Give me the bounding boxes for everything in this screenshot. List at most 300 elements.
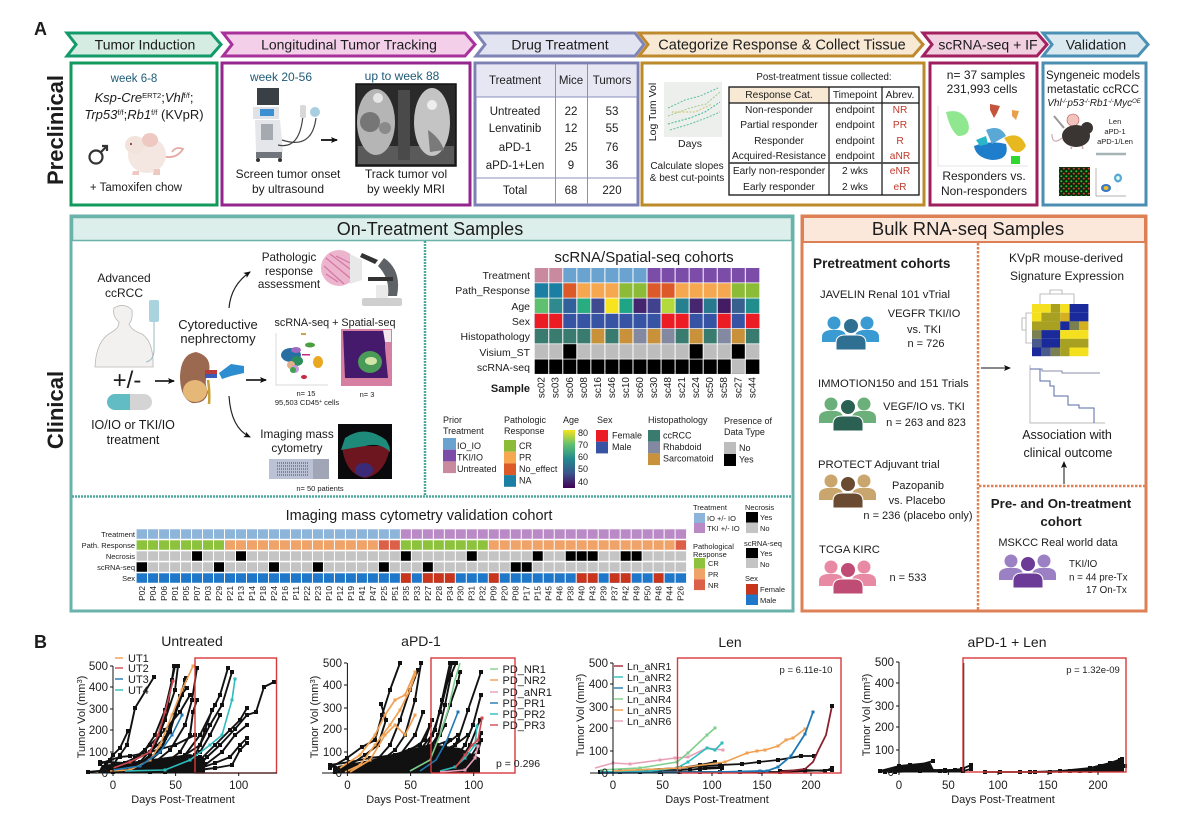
chevron: Longitudinal Tumor Tracking: Longitudinal Tumor Tracking <box>261 36 437 52</box>
legend: UT2 <box>128 663 149 675</box>
chart: aPD-1 + Len <box>860 634 1126 806</box>
x tick labels: 100 <box>229 780 248 792</box>
caption: n=50 patients: n= 50 patients <box>296 484 344 493</box>
x tick labels: 200 <box>1088 780 1108 792</box>
x tick labels: 50 <box>169 780 182 792</box>
chart: UMAP <box>938 104 1028 166</box>
IMC row labels: Necrosis <box>106 552 135 561</box>
table text <box>486 75 632 197</box>
table text: 55 <box>606 123 618 135</box>
IMC patient labels: P20 <box>500 586 510 601</box>
y tick labels: 200 <box>323 724 342 736</box>
cohort: IMMOTION: VEGF/IO vs. TKI <box>883 401 965 413</box>
heading: post-treatment tissue: Post-treatment tissue collected: <box>756 72 892 83</box>
legend: age colorbar: 60 <box>578 452 588 462</box>
legend: age colorbar: Age <box>563 415 579 425</box>
IMC patient labels: P10 <box>324 586 334 601</box>
text: pathologic response assessment: assessment <box>258 278 321 291</box>
table: response categories: Partial responder <box>740 120 818 131</box>
legend: PD_PR2 <box>502 709 545 721</box>
chart: slope thumbnails <box>664 82 722 137</box>
y tick labels: 400 <box>589 679 608 691</box>
table: response categories: Non-responder <box>745 105 814 116</box>
y tick labels: 200 <box>875 722 894 734</box>
y tick labels: 300 <box>89 704 108 716</box>
table grid lines <box>476 64 637 204</box>
panel: categorize response <box>642 63 924 205</box>
table: response categories: eNR <box>890 166 910 177</box>
table text: aPD-1+Len <box>486 160 544 172</box>
IMC patient labels: P15 <box>533 586 543 601</box>
legend: presence of data type: Yes <box>739 454 754 464</box>
cohort: IMMOTION: n = 263 and 823 <box>886 417 966 429</box>
legend: UT4 <box>128 685 149 697</box>
legend: PD_aNR1 <box>502 687 552 699</box>
y tick labels: 400 <box>875 678 894 690</box>
text: signature expression: Signature Expression <box>1010 269 1124 283</box>
chevron: Categorize Response & Collect Tissue: Categorize Response & Collect Tissue <box>658 38 906 54</box>
legend: IMC pathological response: NR <box>708 581 719 590</box>
chevron: Validation: Validation <box>1066 36 1126 52</box>
axis title y: 3 <box>75 679 84 684</box>
table: response categories: Early non-responder <box>733 166 826 177</box>
text: pathologic response assessment: Pathologic <box>262 251 316 264</box>
divider horizontal <box>979 485 1145 487</box>
heading: pre- and on-treatment cohort: cohort <box>1040 514 1082 529</box>
IMC patient labels: P27 <box>423 586 433 601</box>
legend: IMC necrosis: Necrosis <box>745 503 774 512</box>
heatmap sample labels: sc27 <box>733 377 744 398</box>
heatmap row labels: Age <box>511 301 530 313</box>
response window <box>195 658 276 773</box>
table: response categories: Early responder <box>743 182 816 193</box>
p value: p = 1.32e-09 <box>1066 665 1120 676</box>
text: advanced ccRCC: Advanced <box>97 271 151 285</box>
chart: signature heatmap <box>1022 290 1088 356</box>
icon: syringe <box>1096 153 1126 155</box>
panel: validation <box>1043 63 1146 205</box>
table: response categories: R <box>896 136 904 147</box>
genotype text: -/- <box>1084 99 1090 105</box>
arrow down to imaging <box>229 396 250 437</box>
chart: flow plot <box>1096 168 1126 196</box>
table: response categories: Acquired-Resistance <box>732 151 826 162</box>
caption: Days: Days <box>678 138 702 150</box>
table: response categories: Responder <box>754 136 805 147</box>
chart title: Untreated <box>161 633 223 649</box>
image: IMC tissue <box>338 424 392 479</box>
IMC patient labels: P43 <box>588 586 598 601</box>
axis title y: ) <box>861 674 873 677</box>
IMC patient labels: P32 <box>478 586 488 601</box>
legend: PD_PR1 <box>502 698 545 710</box>
heatmap row labels <box>455 270 531 374</box>
timepoint: week 6-8: week 6-8 <box>110 73 157 85</box>
x tick labels: 100 <box>988 780 1008 792</box>
heatmap sample labels <box>537 377 758 398</box>
legend: PD_PR3 <box>502 720 545 732</box>
arrow up to pathology <box>229 272 250 308</box>
axis title y: 3 <box>308 679 317 684</box>
x tick labels <box>610 780 821 792</box>
y tick labels: 0 <box>602 768 608 780</box>
cohort: TCGA KIRC: TCGA KIRC <box>819 544 880 556</box>
legend: IMC pathological response: PR <box>708 570 719 579</box>
axis title x: Days Post-Treatment <box>665 794 769 806</box>
series: UT1 <box>110 666 193 771</box>
chevron: Longitudinal Tumor Tracking <box>223 33 475 56</box>
cohort: PROTECT: Pazopanib <box>892 480 944 492</box>
legend: IMC sex <box>745 574 785 605</box>
x tick labels <box>344 780 483 792</box>
legend: prior treatment: TKI/IO <box>457 452 483 462</box>
axis title y: Tumor Vol (mm <box>76 684 88 758</box>
chevron: Tumor Induction: Tumor Induction <box>95 36 195 52</box>
legend: IMC pathological response: CR <box>708 559 719 568</box>
legend: IMC necrosis <box>745 503 774 533</box>
treatment labels: aPD-1 <box>1104 127 1126 136</box>
image: histology circle <box>321 250 362 286</box>
genotype text line 2: f/f <box>117 108 125 117</box>
treatment labels: aPD-1/Len <box>1097 137 1133 146</box>
legend: IMC scRNA-seq <box>744 539 782 569</box>
series: Ln_aNR6 <box>595 748 723 768</box>
legend: pathologic response: Response <box>504 426 545 436</box>
divider horizontal <box>72 495 792 498</box>
x tick labels: 150 <box>752 780 772 792</box>
IMC patient labels: P40 <box>577 586 587 601</box>
text: pathologic response assessment: response <box>265 265 313 278</box>
legend: PD_NR1 <box>502 664 546 676</box>
table: response categories: aNR <box>890 151 910 162</box>
heatmap sample labels: sc50 <box>705 377 716 398</box>
genotype text: f/f <box>184 91 191 100</box>
heatmap row labels: scRNA-seq <box>477 362 530 374</box>
legend: IMC sex: Female <box>760 585 785 594</box>
chart: Len <box>574 634 841 806</box>
IMC patient labels: P21 <box>225 586 235 601</box>
arrow to clinical outcome <box>981 367 1010 369</box>
series: PD_NR2 <box>340 672 415 772</box>
genotype text: p53 <box>1066 98 1084 109</box>
text: association with clinical outcome: clinical outcome <box>1024 446 1113 460</box>
legend: pathologic response: PR <box>519 452 532 462</box>
IMC patient labels: P02 <box>137 586 147 601</box>
x tick labels: 100 <box>702 780 722 792</box>
axis title y: Tumor Vol (mm <box>309 684 321 758</box>
cohort: JAVELIN: vs. TKI <box>907 324 941 336</box>
row label: Preclinical: Preclinical <box>43 75 68 185</box>
header band <box>72 218 792 240</box>
axis title y: Tumor Vol (mm <box>575 682 587 756</box>
legend: IMC scRNA-seq: No <box>760 560 770 569</box>
y tick labels: 500 <box>875 657 894 669</box>
table text: 220 <box>602 185 622 197</box>
IMC patient labels: P38 <box>566 586 576 601</box>
legend: UT3 <box>128 674 149 686</box>
panel: tumor induction <box>71 63 217 205</box>
x tick labels: 0 <box>610 780 616 792</box>
cohort: IMMOTION <box>818 378 969 431</box>
text: MSKCC: MSKCC Real world data <box>998 537 1118 549</box>
y tick labels: 400 <box>89 682 108 694</box>
series: PD_PR1 <box>420 712 458 771</box>
legend: IMC treatment <box>693 503 740 533</box>
caption: n=3: n= 3 <box>360 390 374 399</box>
cohort: TCGA KIRC: n = 533 <box>889 572 927 584</box>
series: Ln_aNR4 <box>600 728 715 770</box>
IMC patient labels: P30 <box>456 586 466 601</box>
series: PD_PR3 <box>455 718 482 768</box>
caption: track tumor vol: Track tumor vol <box>365 167 447 181</box>
IMC patient labels: P45 <box>544 586 554 601</box>
table text: aPD-1 <box>499 142 531 154</box>
legend: pathologic response: NA <box>519 476 532 486</box>
legend: Ln_aNR4 <box>627 694 672 706</box>
panel: on-treatment samples <box>71 216 793 611</box>
y tick labels: 200 <box>89 725 108 737</box>
caption: n=15: n= 15 <box>297 389 315 398</box>
legend: age colorbar: 50 <box>578 464 588 474</box>
sample counts: 231,993 cells <box>947 82 1017 96</box>
x tick labels: 200 <box>801 780 821 792</box>
IMC patient labels: P05 <box>181 586 191 601</box>
legend: presence of data type: Presence of <box>724 416 772 426</box>
heading: pretreatment cohorts: Pretreatment cohorts <box>813 256 950 271</box>
heading: pre- and on-treatment cohort: Pre- and On-treatment <box>991 496 1131 511</box>
legend: histopathology: Sarcomatoid <box>663 454 714 464</box>
response window <box>678 658 841 773</box>
legend: IMC scRNA-seq: scRNA-seq <box>744 539 782 548</box>
IMC patient labels: P23 <box>313 586 323 601</box>
heatmap sample labels: sc21 <box>677 377 688 398</box>
genotype text line 2: (KVpR) <box>157 107 204 122</box>
legend: IMC necrosis: Yes <box>760 513 772 522</box>
image: MRI scan <box>356 84 456 166</box>
series: UT3 <box>113 715 182 770</box>
x tick labels: 50 <box>942 780 955 792</box>
IMC patient labels: P09 <box>489 586 499 601</box>
cohort: TCGA KIRC <box>819 544 927 594</box>
text: signature expression: KVpR mouse-derived <box>1009 251 1123 265</box>
IMC patient labels: P04 <box>148 586 158 601</box>
legend: age colorbar: 80 <box>578 428 588 438</box>
axis title x: Days Post-Treatment <box>131 794 235 806</box>
text: imaging mass cytometry: cytometry <box>271 441 323 455</box>
response window <box>963 658 1126 772</box>
caption: screen tumor onset: by ultrasound <box>252 182 324 196</box>
icon: kidney <box>180 352 217 404</box>
icon: people tan <box>819 474 876 508</box>
icon: tissue microarray slide <box>269 459 329 479</box>
cohort: JAVELIN: n = 726 <box>907 338 945 350</box>
icon: microscope <box>360 253 402 306</box>
IMC patient labels: P34 <box>445 586 455 601</box>
table: response categories: PR <box>893 120 907 131</box>
legend: pathologic response: No_effect <box>519 464 558 474</box>
IMC patient labels: P03 <box>203 586 213 601</box>
chevron: Validation <box>1043 33 1148 56</box>
heading: syngeneic models: metastatic ccRCC <box>1047 84 1139 96</box>
axis title x: Days Post-Treatment <box>366 794 470 806</box>
IMC patient labels: P12 <box>335 586 345 601</box>
heading: syngeneic models: Syngeneic models <box>1046 70 1140 82</box>
IMC patient labels: P51 <box>390 586 400 601</box>
icon: mouse <box>125 133 183 175</box>
legend: IMC sex: Male <box>760 596 776 605</box>
heatmap row labels: Path_Response <box>455 285 530 297</box>
series: PD_NR1 <box>410 663 460 771</box>
table: response categories: endpoint <box>835 136 875 147</box>
table text: 76 <box>606 142 618 154</box>
y tick labels: 300 <box>323 703 342 715</box>
arrow <box>321 139 337 141</box>
genotype text line 2: Rb1 <box>127 107 151 122</box>
series: PD_PR2 <box>440 726 477 771</box>
y tick labels: 500 <box>89 661 108 673</box>
arrow to kidney <box>155 380 174 382</box>
y tick labels: 100 <box>589 746 608 758</box>
genotype text: -/- <box>1062 99 1067 105</box>
caption: 95,503 cells: + <box>319 399 322 405</box>
response window <box>431 658 515 773</box>
IMC patient labels: P22 <box>302 586 312 601</box>
cohort: PROTECT <box>818 459 973 522</box>
table: response categories: endpoint <box>835 151 875 162</box>
caption: track tumor vol: by weekly MRI <box>367 182 445 196</box>
icon: dark mouse with injection <box>1052 114 1093 149</box>
series: UT2 <box>113 681 173 768</box>
axes <box>322 663 474 776</box>
y tick labels <box>589 658 608 780</box>
x tick labels: 100 <box>464 780 483 792</box>
legend: histopathology: Histopathology <box>648 415 708 425</box>
text: association with clinical outcome: Association with <box>1022 428 1112 442</box>
legend: Ln_aNR6 <box>627 716 672 728</box>
heatmap sample labels: sc16 <box>593 377 604 398</box>
legend: sex: Sex <box>597 415 613 425</box>
chevron: Tumor Induction <box>67 33 221 56</box>
legend: IMC scRNA-seq: Yes <box>760 549 772 558</box>
series: black curves <box>880 759 1125 772</box>
x tick labels: 50 <box>404 780 417 792</box>
IMC patient labels: P37 <box>610 586 620 601</box>
text: cytoreductive nephrectomy: Cytoreductive <box>178 317 258 332</box>
table: response categories: 2 wks <box>842 166 868 177</box>
legend: prior treatment: Treatment <box>443 426 484 436</box>
table text: Tumors <box>593 75 632 87</box>
icon: people pink <box>819 560 876 594</box>
IMC patient labels: P47 <box>368 586 378 601</box>
IMC patient labels: P07 <box>192 586 202 601</box>
IMC patient labels: P19 <box>346 586 356 601</box>
legend: presence of data type <box>724 416 773 466</box>
IMC patient labels: P35 <box>401 586 411 601</box>
legend: IMC pathological response <box>693 542 734 590</box>
legend: histopathology: Rhabdoid <box>663 442 702 452</box>
legend: Ln_aNR5 <box>627 705 672 717</box>
y tick labels: 400 <box>323 680 342 692</box>
IMC patient labels: P06 <box>159 586 169 601</box>
panel: drug treatment table <box>475 63 638 205</box>
IMC row labels: scRNA-seq <box>97 563 135 572</box>
legend: IMC treatment: IO +/- IO <box>707 514 736 523</box>
text: imaging mass cytometry: Imaging mass <box>260 427 334 441</box>
genotype text: ; <box>161 90 165 105</box>
table text: Mice <box>559 75 583 87</box>
text: advanced ccRCC: ccRCC <box>105 286 143 300</box>
p value: p = 0.296 <box>496 758 540 770</box>
y tick labels <box>875 657 894 779</box>
chart: CD45 UMAP <box>276 333 328 385</box>
genotype text: Vhl <box>1047 98 1062 109</box>
IMC patient labels: P08 <box>511 586 521 601</box>
x tick labels <box>110 780 248 792</box>
icon: pill <box>107 394 152 410</box>
IMC patient labels: P16 <box>280 586 290 601</box>
series: PD_aNR1 <box>440 746 478 772</box>
heatmap sample labels: sc02 <box>537 377 548 398</box>
symbol: plus/minus: +/- <box>113 367 141 394</box>
caption: screen tumor onset: Screen tumor onset <box>236 167 340 181</box>
text: MSKCC counts: TKI/IO <box>1069 559 1097 570</box>
icon: patient with IV <box>95 300 159 367</box>
chart: Kaplan-Meier <box>1030 365 1105 423</box>
table: response categories <box>729 87 919 195</box>
panel label A: A <box>34 19 47 39</box>
IMC patient labels: P31 <box>467 586 477 601</box>
genotype text line 2: Trp53 <box>84 107 118 122</box>
x tick labels: 0 <box>110 780 116 792</box>
IMC patient labels: P18 <box>258 586 268 601</box>
caption: responders vs non-responders: Responders vs. <box>942 169 1026 183</box>
legend: Ln_aNR3 <box>627 683 672 695</box>
icon: ultrasound machine <box>253 88 320 162</box>
IMC patient labels: P24 <box>269 586 279 601</box>
table header background <box>477 65 636 97</box>
y tick labels: 500 <box>589 658 608 670</box>
legend: presence of data type: No <box>739 443 751 453</box>
legend: histopathology: ccRCC <box>663 430 692 440</box>
heatmap row labels: Visium_ST <box>479 347 531 359</box>
heatmap sample labels: sc03 <box>551 377 562 398</box>
heading: On-Treatment Samples: On-Treatment Samples <box>337 219 523 239</box>
heatmap sample labels: sc44 <box>747 377 758 398</box>
heatmap sample labels: sc24 <box>691 377 702 398</box>
legend: age colorbar <box>563 415 588 488</box>
axis title y: 3 <box>860 677 869 682</box>
legend: Ln_aNR1 <box>627 661 672 673</box>
caption: 95,503 cells: 95,503 CD45 <box>275 398 319 407</box>
table: response categories: endpoint <box>835 105 875 116</box>
cohort: PROTECT: vs. Placebo <box>889 495 945 507</box>
table: response categories: Timepoint <box>833 90 877 101</box>
sample label: Sample <box>491 383 530 395</box>
y tick labels: 100 <box>89 747 108 759</box>
IMC patient labels: P29 <box>214 586 224 601</box>
series: UT4 <box>125 679 235 771</box>
genotype text: Rb1 <box>1090 98 1108 109</box>
legend: pathologic response <box>504 415 558 487</box>
y tick labels: 500 <box>323 658 342 670</box>
legend: sex: Female <box>612 430 642 440</box>
chevron: Drug Treatment: Drug Treatment <box>511 36 609 52</box>
legend: prior treatment <box>443 415 497 474</box>
legend: age colorbar: 70 <box>578 440 588 450</box>
IMC row labels: Sex <box>122 574 135 583</box>
axis label: Log Tum Vol: Log Tum Vol <box>647 83 659 141</box>
table: response categories: endpoint <box>835 120 875 131</box>
